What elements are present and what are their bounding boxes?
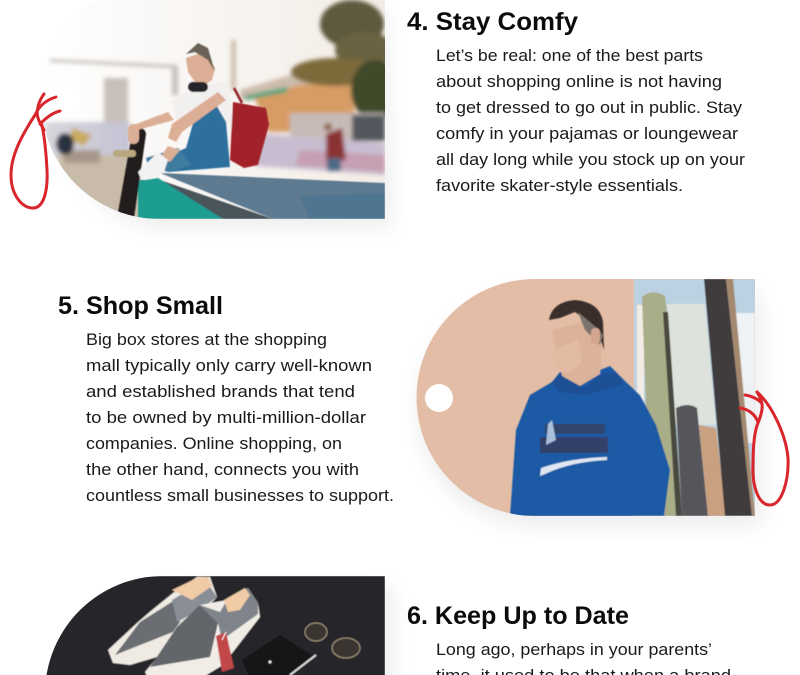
icon: red string 5 <box>740 392 788 505</box>
left shoe <box>108 577 217 665</box>
panel: tip 4 photo tag <box>40 0 399 228</box>
right shoe <box>145 588 260 675</box>
wallet <box>242 635 315 675</box>
heading: tip 6: 6. Keep Up to Date <box>407 602 629 630</box>
text block: tip 4: Let’s be real: one of the best parts <box>436 47 703 65</box>
text block: tip 6 <box>436 641 731 675</box>
seated figure <box>174 84 234 130</box>
heading: tip 4: 4. Stay Comfy <box>407 8 578 36</box>
text block: tip 5: companies. Online shopping, on <box>86 435 342 453</box>
icon: red string 4 <box>11 94 60 208</box>
text block: tip 5: Big box stores at the shopping <box>86 331 327 349</box>
text block: tip 6: Long ago, perhaps in your parents’ <box>436 641 712 659</box>
heading: tip 5: 5. Shop Small <box>58 292 223 320</box>
text block: tip 5 <box>86 331 394 505</box>
text block: tip 4: to get dressed to go out in public. Stay <box>436 99 743 117</box>
hole <box>425 384 453 412</box>
text block: tip 5: countless small businesses to support. <box>86 487 394 505</box>
hole <box>55 87 81 113</box>
text block: tip 5: mall typically only carry well-known <box>86 357 372 375</box>
text block: tip 5: to be owned by multi-million-dollar <box>86 409 367 427</box>
text block: tip 5: the other hand, connects you with <box>86 461 359 479</box>
text block: tip 5: and established brands that tend <box>86 383 355 401</box>
text block: tip 4: all day long while you stock up on your <box>436 151 746 169</box>
panel: tip 6 photo tag <box>44 576 392 675</box>
photo: slip-on shoes, wallet and sunglasses <box>44 576 385 675</box>
panel: tip 5 photo tag <box>416 279 762 526</box>
sunglasses <box>305 623 360 658</box>
text block: tip 4: comfy in your pajamas or loungewear <box>436 125 739 143</box>
text block: tip 4: about shopping online is not having <box>436 73 722 91</box>
text block: tip 4: favorite skater-style essentials. <box>436 177 683 195</box>
text block: tip 4 <box>436 47 746 195</box>
photo: skater at skate park <box>40 0 399 220</box>
photo: man in blue hoodie <box>416 279 756 519</box>
